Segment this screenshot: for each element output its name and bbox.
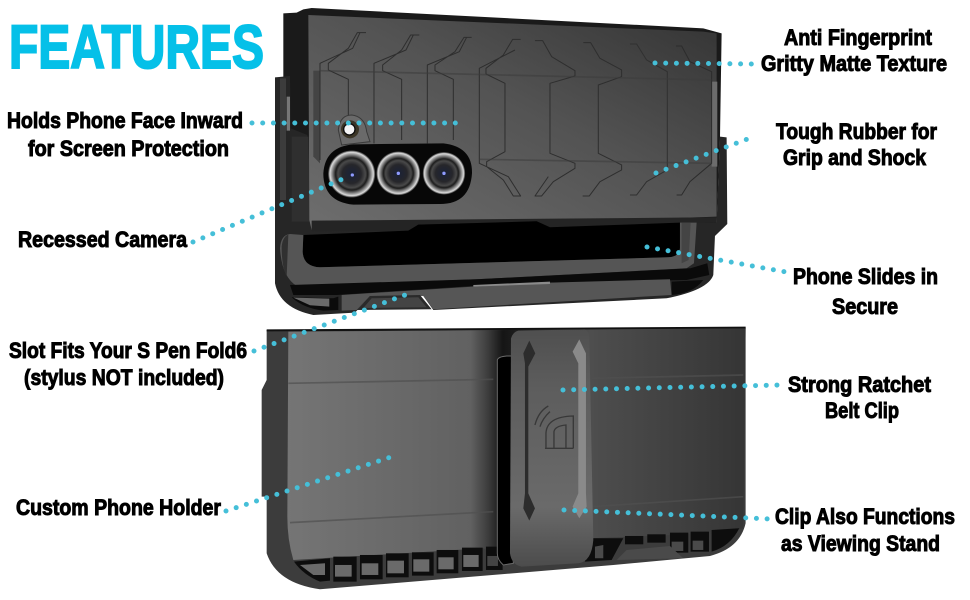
flash <box>338 115 370 145</box>
outer frame silhouette <box>275 76 727 315</box>
label: s pen slot <box>9 338 247 390</box>
ratchet clip <box>510 329 593 567</box>
label: anti fingerprint <box>761 25 947 76</box>
callout line: holds phone face inward <box>252 120 458 126</box>
clip base <box>497 356 513 565</box>
callout line: ratchet belt clip <box>563 385 780 390</box>
label: holds phone face inward: Holds Phone Face Inward <box>7 108 243 133</box>
label: ratchet belt clip <box>788 372 932 423</box>
holder face <box>287 328 746 560</box>
side clip strip <box>287 97 290 131</box>
label: holds phone face inward <box>7 108 243 161</box>
clip logo <box>535 406 573 448</box>
label: tough rubber <box>776 119 937 170</box>
vent slots <box>294 528 739 582</box>
callout line: tough rubber <box>656 137 753 173</box>
belt clip holder <box>262 327 746 589</box>
label: tough rubber: Grip and Shock <box>783 145 927 170</box>
label: recessed camera: Recessed Camera <box>18 227 188 252</box>
callout line: recessed camera <box>193 178 345 242</box>
shell back panel <box>308 15 717 230</box>
callout line: custom phone holder <box>226 457 391 511</box>
corner latch <box>292 297 338 311</box>
label: phone slides in <box>793 264 938 319</box>
callout line: anti fingerprint <box>655 63 755 64</box>
label: anti fingerprint: Gritty Matte Texture <box>761 51 947 76</box>
label: phone slides in: Phone Slides in <box>793 264 938 289</box>
black phone window <box>303 221 680 267</box>
callout line: phone slides in <box>647 247 786 272</box>
label: s pen slot: Slot Fits Your S Pen Fold6 <box>9 338 247 363</box>
lower black gap <box>290 263 709 295</box>
texture grooves <box>320 33 712 196</box>
label: phone slides in: Secure <box>832 294 898 319</box>
lower bar <box>342 279 672 311</box>
label: anti fingerprint: Anti Fingerprint <box>784 25 933 50</box>
label: custom phone holder: Custom Phone Holder <box>16 495 221 520</box>
s pen slot <box>357 295 432 310</box>
label: viewing stand <box>775 504 955 556</box>
label: tough rubber: Tough Rubber for <box>776 119 937 144</box>
phone case: front shell <box>275 8 727 315</box>
camera module <box>323 143 472 205</box>
callout line: s pen slot <box>254 295 405 351</box>
label: viewing stand: as Viewing Stand <box>781 531 940 556</box>
callout line: viewing stand <box>564 510 771 519</box>
label: holds phone face inward: for Screen Protection <box>28 136 229 161</box>
clip right rail <box>573 339 587 518</box>
title: FEATURES <box>9 13 264 81</box>
tray surround <box>280 223 697 286</box>
clip left rail <box>523 341 535 521</box>
lenses <box>328 150 375 198</box>
label: ratchet belt clip: Belt Clip <box>825 398 899 423</box>
label: s pen slot: (stylus NOT included) <box>24 365 224 390</box>
holder body <box>262 327 746 589</box>
phone spine <box>283 8 722 230</box>
label: ratchet belt clip: Strong Ratchet <box>788 372 932 397</box>
